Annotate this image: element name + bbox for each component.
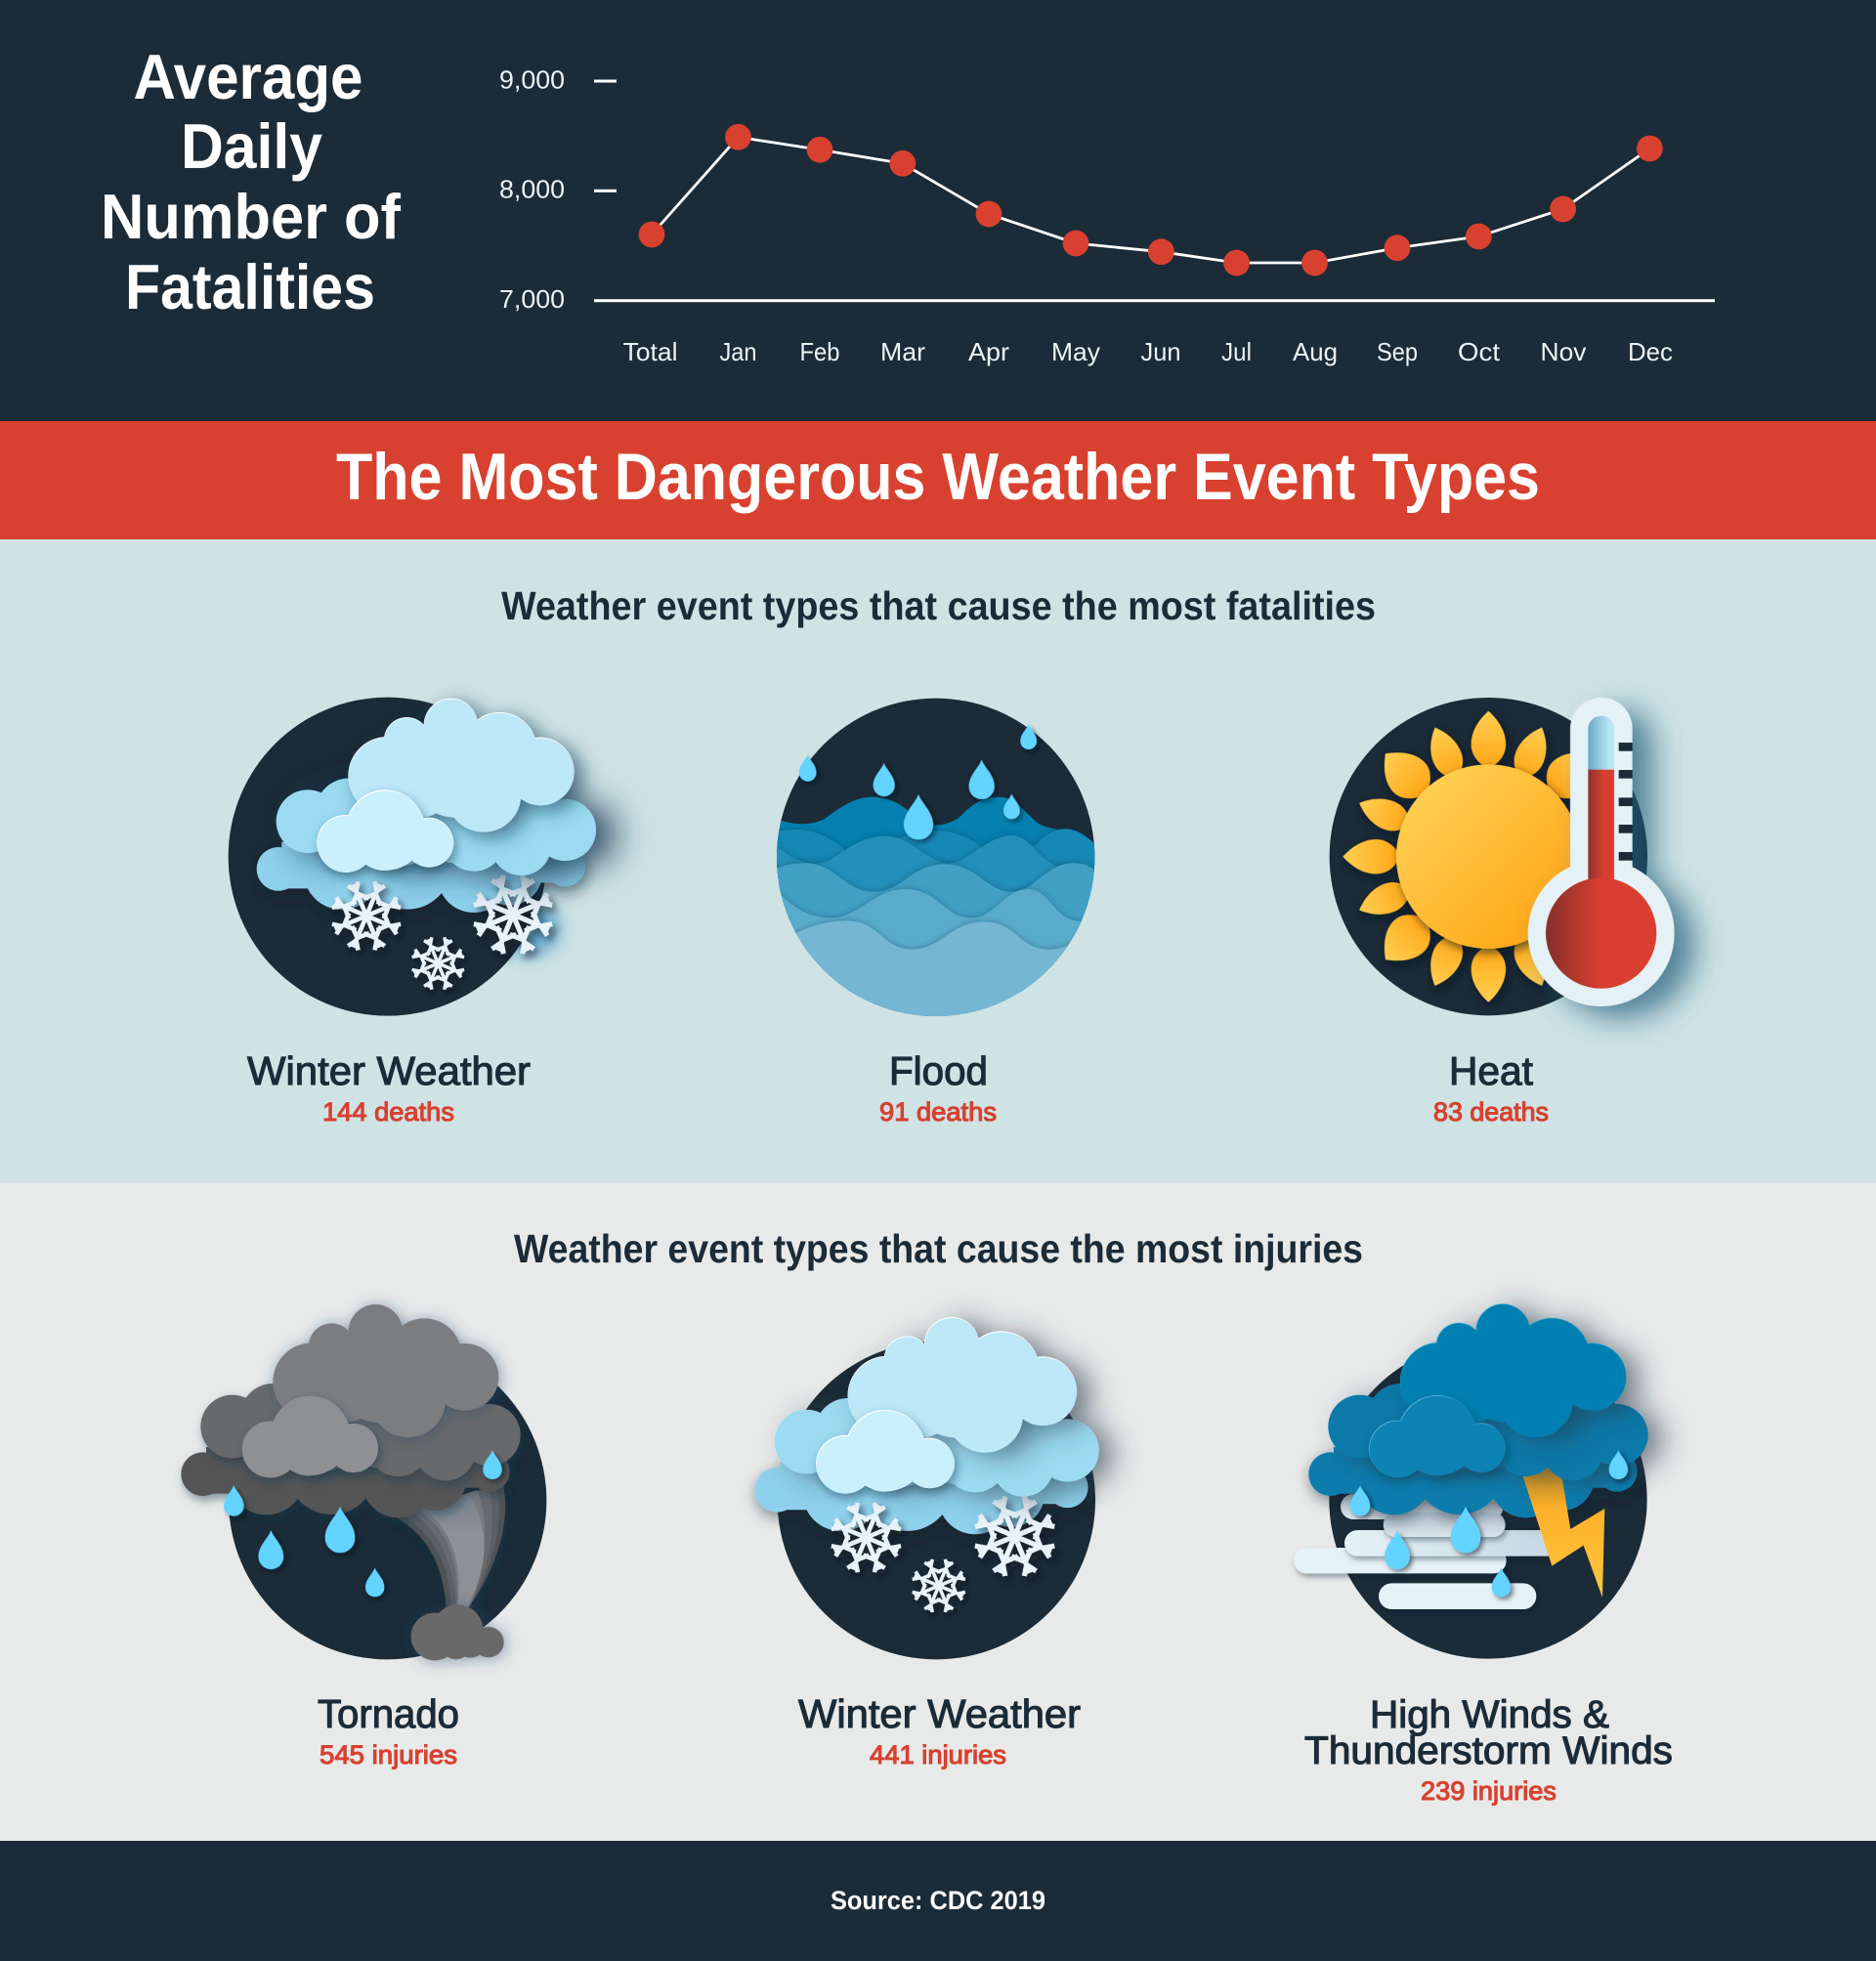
source note: Source: CDC 2019	[831, 1886, 1045, 1915]
data line	[652, 137, 1649, 263]
title	[101, 41, 401, 322]
panel: fatalities background	[0, 539, 1876, 1183]
title: Fatalities	[125, 251, 375, 322]
y-axis labels: 7,000	[499, 284, 565, 314]
label: flood fatalities: 91 deaths	[879, 1097, 997, 1127]
ground cloud	[411, 1604, 504, 1660]
label: winter weather injuries: 441 injuries	[870, 1740, 1006, 1769]
label: high winds injuries	[1304, 1693, 1673, 1806]
icon: heat with sun and thermometer	[1330, 698, 1675, 1015]
rain drops	[1350, 1450, 1628, 1597]
panel: header background	[0, 0, 1876, 421]
month labels: Oct	[1458, 337, 1501, 366]
label: tornado injuries: Tornado	[318, 1691, 459, 1736]
label: tornado injuries	[318, 1691, 459, 1769]
icon: flood	[772, 699, 1097, 1033]
y-axis labels: 9,000	[499, 64, 565, 94]
title: Average	[133, 41, 363, 112]
storm clouds	[181, 1304, 521, 1517]
label: heat fatalities: Heat	[1449, 1048, 1534, 1093]
month labels: Nov	[1540, 337, 1587, 366]
y-axis labels	[499, 64, 565, 314]
month labels: Aug	[1293, 337, 1338, 366]
data points	[639, 124, 1663, 276]
label: winter weather injuries: Winter Weather	[798, 1691, 1081, 1736]
sun petals	[1343, 711, 1623, 1002]
icon: tornado	[181, 1304, 546, 1660]
funnel	[391, 1485, 505, 1607]
label: winter weather fatalities	[247, 1048, 531, 1127]
icon: winter weather (injuries)	[755, 1317, 1099, 1659]
month labels	[623, 337, 1673, 366]
label: high winds injuries: 239 injuries	[1421, 1776, 1556, 1806]
heading: injuries: Weather event types that cause the most injuries	[514, 1226, 1363, 1271]
storm clouds and lightning bolt	[1308, 1303, 1648, 1598]
month labels: Apr	[968, 337, 1009, 366]
month labels: Sep	[1377, 337, 1418, 366]
month labels: May	[1051, 337, 1100, 366]
title: Number of	[101, 181, 401, 252]
label: winter weather injuries	[798, 1691, 1081, 1769]
label: high winds injuries: Thunderstorm Winds	[1304, 1729, 1673, 1772]
line chart: average daily fatalities by month	[499, 64, 1715, 366]
label: tornado injuries: 545 injuries	[320, 1740, 457, 1769]
red banner heading: The Most Dangerous Weather Event Types	[336, 440, 1540, 514]
month labels: Jul	[1221, 337, 1252, 366]
label: winter weather fatalities: Winter Weather	[247, 1048, 531, 1093]
sun disc	[1396, 764, 1581, 949]
month labels: Feb	[799, 337, 840, 366]
label: winter weather fatalities: 144 deaths	[322, 1097, 454, 1127]
label: high winds injuries: High Winds &	[1370, 1693, 1609, 1736]
axis lines and ticks	[594, 80, 1715, 302]
red banner heading	[0, 421, 1876, 539]
label: flood fatalities: Flood	[889, 1048, 988, 1093]
label: flood fatalities	[879, 1048, 997, 1127]
month labels: Jan	[719, 337, 756, 366]
wind bars	[1294, 1494, 1559, 1609]
month labels: Total	[623, 337, 678, 366]
panel: injuries background	[0, 1183, 1876, 1841]
month labels: Jun	[1141, 337, 1180, 366]
y-axis labels: 8,000	[499, 174, 565, 203]
thermometer	[1528, 698, 1675, 1006]
month labels: Mar	[880, 337, 925, 366]
label: heat fatalities: 83 deaths	[1433, 1097, 1549, 1127]
panel: footer background	[0, 1841, 1876, 1961]
title: Daily	[181, 110, 322, 182]
rain drops	[224, 1450, 502, 1597]
month labels: Dec	[1628, 337, 1673, 366]
icon: winter weather (fatalities)	[229, 698, 596, 1016]
label: heat fatalities	[1433, 1048, 1549, 1127]
heading: fatalities: Weather event types that cause the most fatalities	[501, 583, 1376, 628]
icon: high winds and thunderstorm	[1294, 1303, 1648, 1659]
